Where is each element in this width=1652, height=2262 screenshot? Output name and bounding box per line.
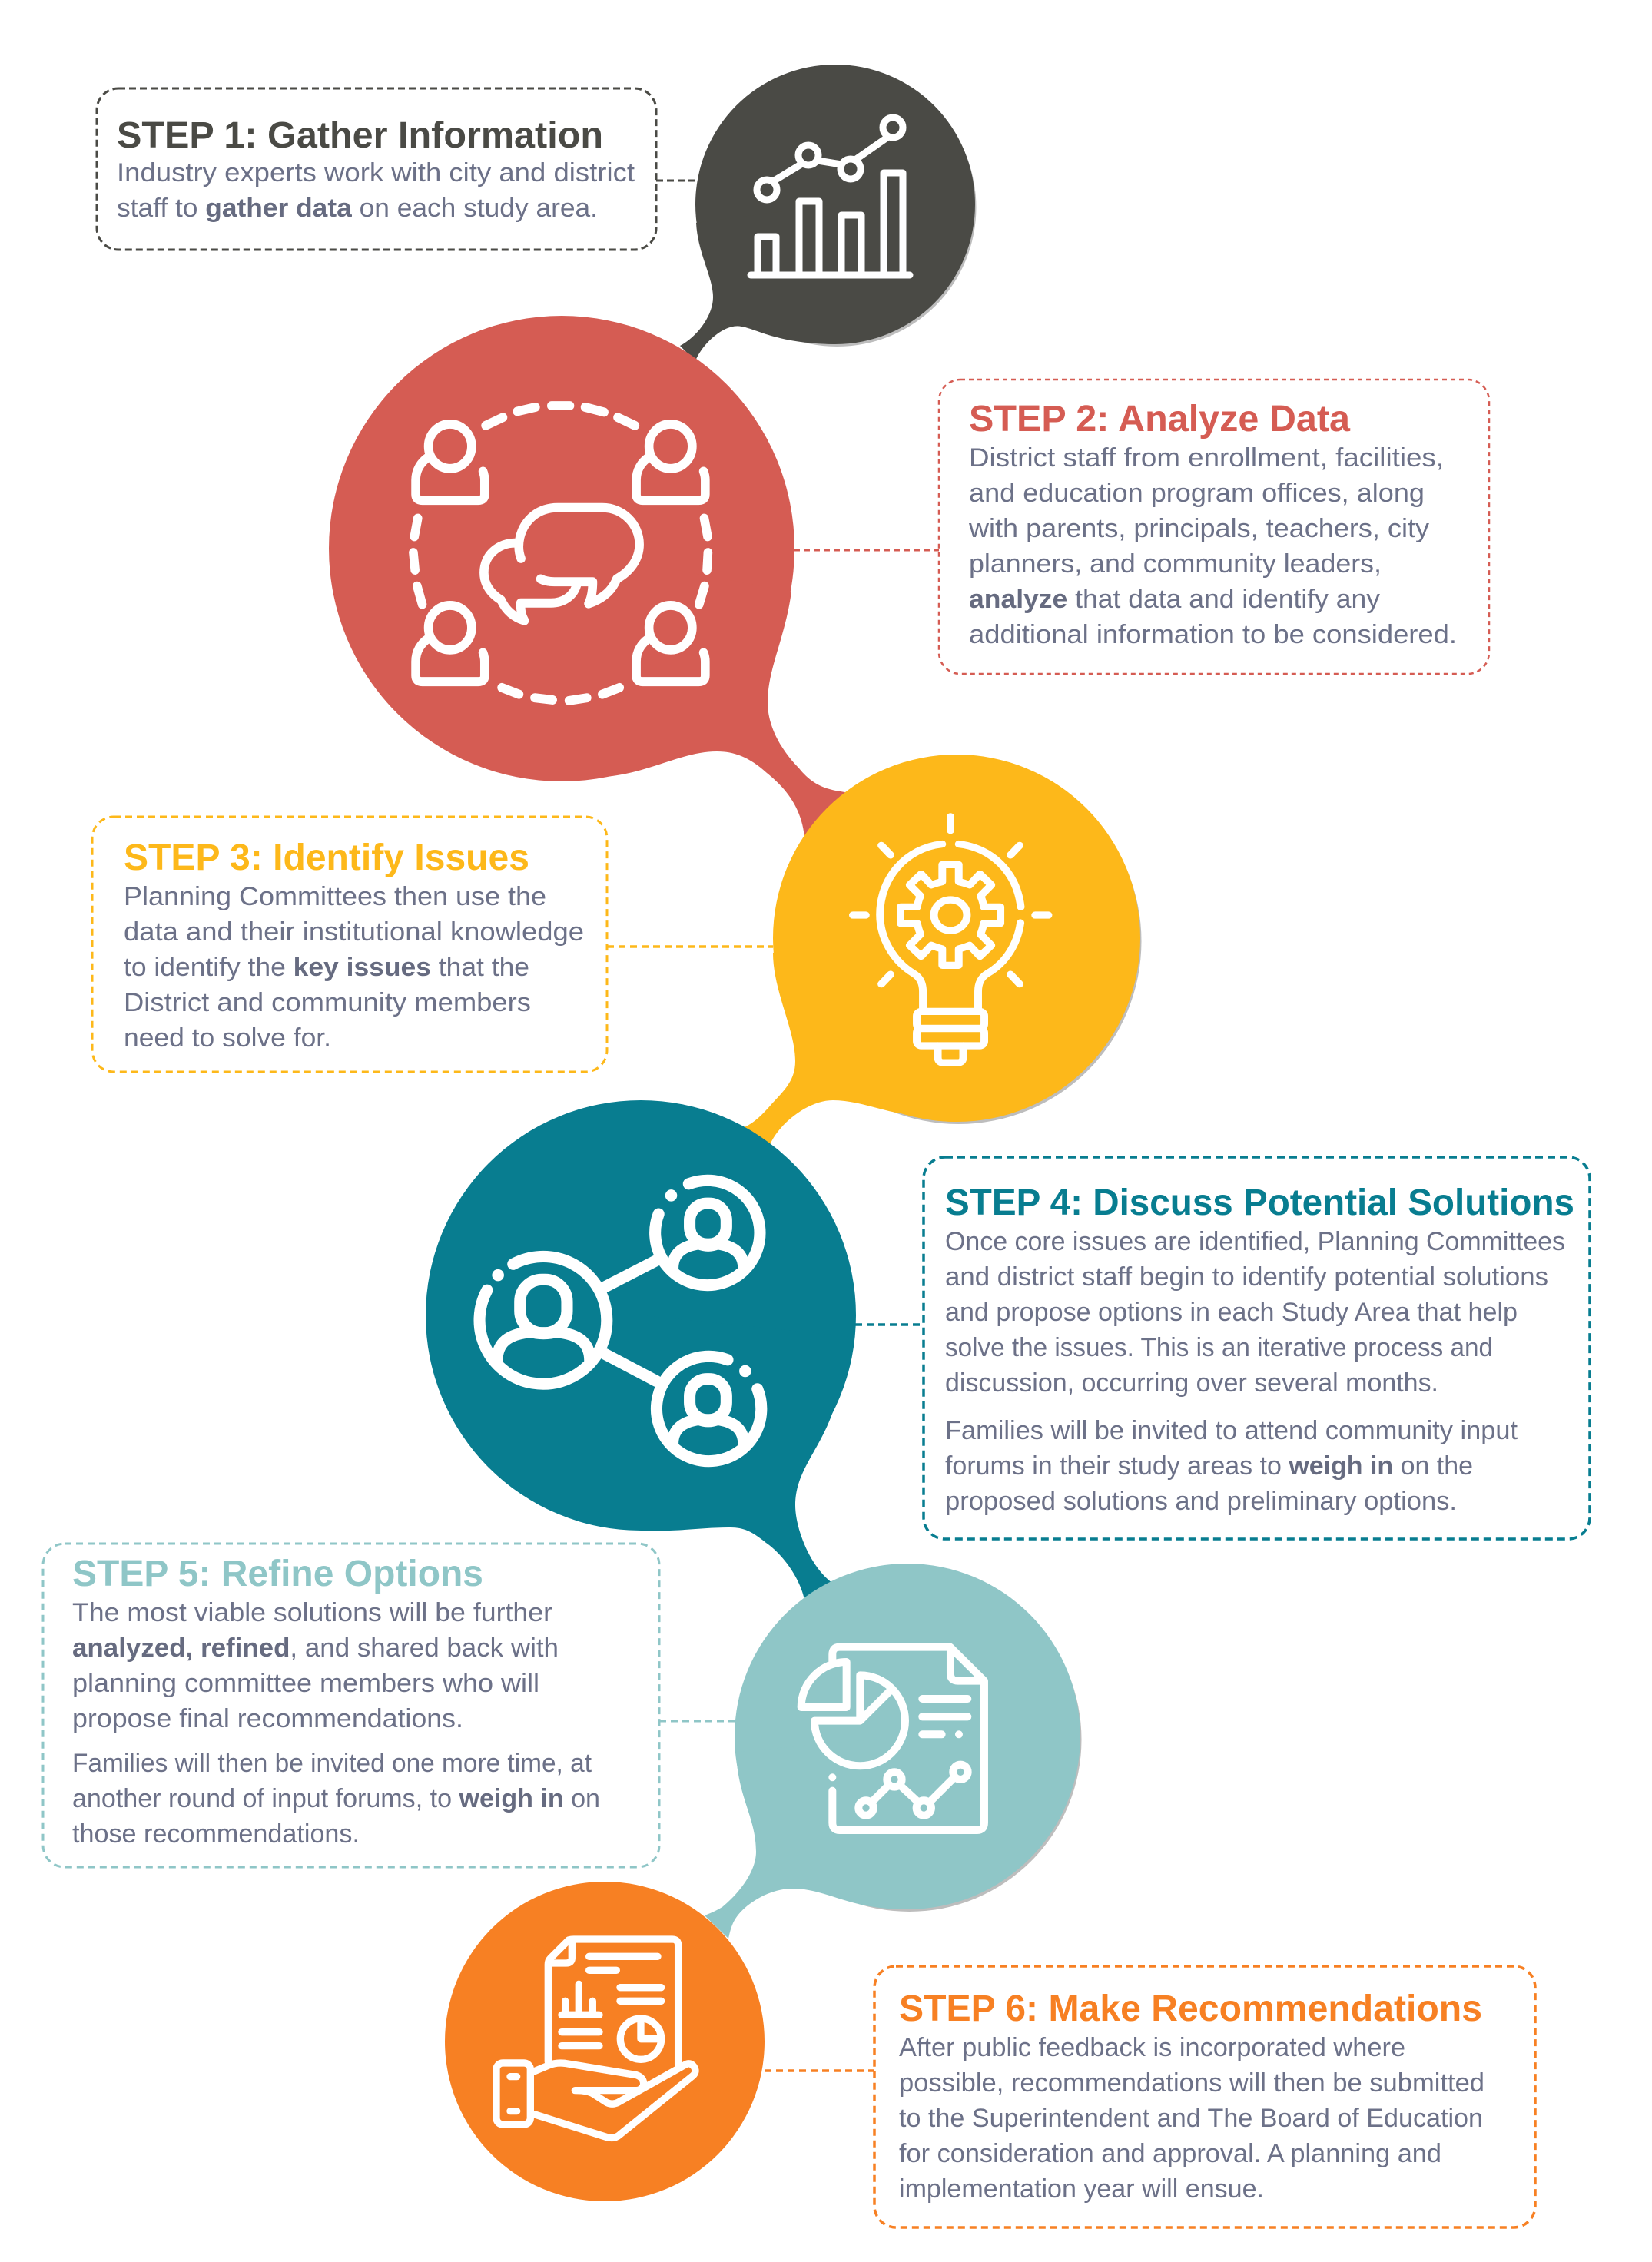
- bubble: step 5: [705, 1564, 1082, 1939]
- icon: report with pie and line charts: [801, 1647, 984, 1830]
- body: step 3: need to solve for.: [124, 1023, 331, 1053]
- body: step 3: Planning Committees then use the: [124, 882, 546, 911]
- body: step 4 first paragraph: solve the issues. This is an iterative process and: [945, 1333, 1493, 1362]
- body: step 5 first paragraph: planning committee members who will: [72, 1669, 539, 1698]
- body: step 4 first paragraph: Once core issues are identified, Planning Committees: [945, 1227, 1565, 1256]
- body: step 5 first paragraph: analyzed, refined, and shared back with: [72, 1633, 559, 1663]
- step 2 connector: [794, 549, 939, 552]
- step 4 connector: [855, 1323, 924, 1326]
- body: step 4 second paragraph: [945, 1416, 1518, 1516]
- body: step 1: [117, 158, 635, 223]
- body: step 5 first paragraph: The most viable solutions will be further: [72, 1598, 552, 1627]
- bubble: step 3: [745, 755, 1142, 1145]
- heading: step 6: STEP 6: Make Recommendations: [899, 1988, 1482, 2029]
- body: step 2: with parents, principals, teachers, city: [968, 514, 1429, 543]
- body: step 2: additional information to be considered.: [969, 620, 1457, 649]
- body: step 6: to the Superintendent and The Board of Education: [899, 2104, 1483, 2133]
- bubble: step 2: [329, 316, 845, 837]
- body: step 2: [968, 443, 1457, 649]
- body: step 2: analyze that data and identify any: [969, 585, 1380, 614]
- bubble: step 6: [445, 1882, 765, 2201]
- body: step 6: After public feedback is incorporated where: [899, 2033, 1405, 2062]
- body: step 3: District and community members: [124, 988, 531, 1017]
- body: step 4 second paragraph: forums in their study areas to weigh in on the: [945, 1451, 1473, 1481]
- body: step 6: possible, recommendations will then be submitted: [899, 2068, 1484, 2098]
- body: step 4 first paragraph: and district staff begin to identify potential solutions: [945, 1262, 1548, 1292]
- text panel: step 6: [874, 1966, 1535, 2227]
- text panel: step 3: [92, 817, 607, 1072]
- body: step 3: [124, 882, 584, 1053]
- body: step 6: implementation year will ensue.: [899, 2174, 1264, 2204]
- body: step 6: for consideration and approval. A planning and: [899, 2139, 1441, 2168]
- text panel: step 2: [939, 380, 1489, 674]
- heading: step 4: STEP 4: Discuss Potential Solutions: [945, 1182, 1574, 1223]
- heading: step 3: STEP 3: Identify Issues: [124, 837, 529, 878]
- body: step 1: staff to gather data on each study area.: [117, 194, 598, 223]
- body: step 5 second paragraph: [72, 1749, 600, 1849]
- body: step 5 first paragraph: [72, 1598, 559, 1733]
- body: step 2: planners, and community leaders,: [969, 549, 1382, 579]
- body: step 4 first paragraph: discussion, occurring over several months.: [945, 1368, 1438, 1398]
- text panel: step 1: [97, 88, 656, 250]
- body: step 4 second paragraph: Families will be invited to attend community input: [945, 1416, 1518, 1445]
- body: step 2: District staff from enrollment, facilities,: [969, 443, 1444, 473]
- icon: light bulb with gear: [853, 817, 1048, 1063]
- body: step 3: to identify the key issues that the: [124, 953, 529, 982]
- body: step 5 first paragraph: propose final recommendations.: [72, 1704, 463, 1733]
- body: step 1: Industry experts work with city and district: [117, 158, 635, 187]
- icon: hand holding report: [496, 1939, 695, 2138]
- bubble: step 4: [426, 1100, 856, 1600]
- text panel: step 5: [43, 1544, 659, 1867]
- body: step 3: data and their institutional knowledge: [124, 917, 584, 947]
- icon: people in discussion circle: [413, 406, 708, 701]
- step 3 connector: [607, 945, 773, 948]
- body: step 4 first paragraph: and propose options in each Study Area that help: [945, 1298, 1518, 1327]
- body: step 5 second paragraph: Families will then be invited one more time, at: [72, 1749, 592, 1778]
- bubble: step 1: [680, 65, 976, 361]
- body: step 2: and education program offices, along: [969, 479, 1425, 508]
- text panel: step 4: [924, 1157, 1590, 1539]
- icon: three connected users: [479, 1180, 761, 1461]
- body: step 4 second paragraph: proposed solutions and preliminary options.: [945, 1487, 1457, 1516]
- icon: bar and line chart: [751, 118, 910, 275]
- body: step 5 second paragraph: those recommendations.: [72, 1819, 360, 1849]
- body: step 4 first paragraph: [945, 1227, 1565, 1398]
- step 5 connector: [659, 1720, 736, 1723]
- heading: step 5: STEP 5: Refine Options: [72, 1554, 483, 1594]
- body: step 6: [899, 2033, 1484, 2204]
- heading: step 1: STEP 1: Gather Information: [117, 115, 603, 156]
- heading: step 2: STEP 2: Analyze Data: [969, 399, 1350, 439]
- step 1 connector: [656, 180, 698, 181]
- step 6 connector: [765, 2069, 874, 2072]
- body: step 5 second paragraph: another round of input forums, to weigh in on: [72, 1784, 600, 1813]
